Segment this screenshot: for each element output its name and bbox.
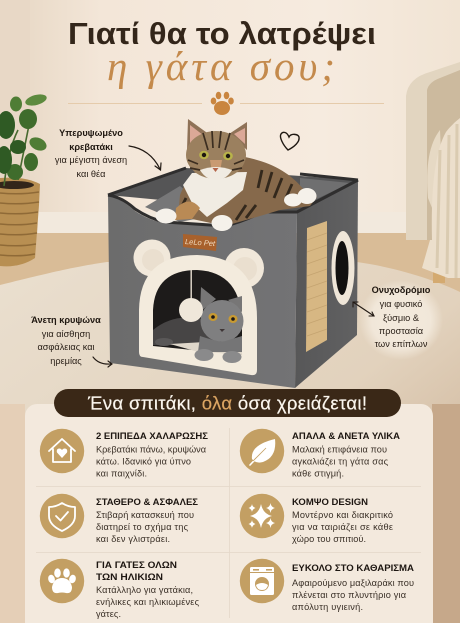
callout: scratcher: ξύσμιο & [383,313,419,323]
icon: paw [40,559,84,603]
icon: shield with check [40,494,84,538]
feature: two levels: Κρεβατάκι πάνω, κρυψώνα [96,444,207,454]
feature: easy cleaning [240,559,414,612]
callout: scratcher: των επίπλων [375,339,428,349]
subtitle: η γάτα σου; [107,43,335,89]
callout: scratcher: προστασία [379,326,424,336]
feature: all ages: γάτες. [96,609,121,619]
glow behind scratcher callout [359,280,443,360]
feature: stable and safe: διατηρεί το σχήμα της [96,522,189,532]
feature: two levels: κάτω. Ιδανικό για ύπνο [96,456,191,466]
house: front [108,195,297,388]
headline pill: Ένα σπιτάκι, όλα όσα χρειάζεται! [87,392,367,414]
feature: two levels [40,429,208,478]
feature: easy cleaning: ΕΥΚΟΛΟ ΣΤΟ ΚΑΘΑΡΙΣΜΑ [292,563,414,574]
feature: soft materials: αγκαλιάζει τη γάτα σας [292,456,389,466]
feature: soft materials: κάθε στιγμή. [292,468,344,478]
icon: house with heart [40,429,84,473]
feature: all ages: ΤΩΝ ΗΛΙΚΙΩΝ [96,572,163,583]
feature: soft materials [240,429,400,478]
feature: soft materials: ΑΠΑΛΑ & ΑΝΕΤΑ ΥΛΙΚΑ [292,431,400,442]
callout: elevated bed: κρεβατάκι [69,142,113,152]
callout: scratcher [372,285,431,349]
callout: elevated bed: και θέα [77,169,106,179]
callout: hideaway: για αίσθηση [42,329,90,339]
feature: easy cleaning: Αφαιρούμενο μαξιλαράκι που [292,578,414,588]
tabby cat on top [156,119,317,231]
feature: easy cleaning: πλένεται στο πλυντήριο για [292,590,407,600]
brand label [183,234,217,251]
house: rim [108,180,358,226]
callout: hideaway: ηρεμίας [50,356,82,366]
arrow: to elevated bed [129,146,161,170]
panel: features [25,404,433,623]
round side window [332,231,354,305]
headline pill [54,389,401,417]
feature: stable and safe: και δεν γλιστράει. [96,534,170,544]
callout: elevated bed [55,128,127,179]
feature: all ages: ενήλικες και ηλικιωμένες [96,597,200,607]
house: right side [295,180,358,388]
callout: scratcher: Ονυχοδρόμιο [372,285,431,295]
house: interior [108,168,358,213]
armchair and throw blanket [406,62,460,283]
feature: all ages [40,559,200,619]
feature: stable and safe: ΣΤΑΘΕΡΟ & ΑΣΦΑΛΕΣ [96,497,198,508]
feature: stylish design: ΚΟΜΨΟ DESIGN [292,497,368,508]
hanging pom-pom toy [179,270,203,322]
feature: stylish design: για να ταιριάζει σε κάθε [292,522,393,532]
callout: hideaway: Άνετη κρυψώνα [31,315,101,325]
divider with paw [68,92,384,115]
callout: elevated bed: για μέγιστη άνεση [55,155,127,165]
feature: stable and safe: Στιβαρή κατασκευή που [96,510,194,520]
callout: scratcher: για φυσικό [380,299,422,309]
grey cat inside [153,287,244,363]
icon: washing machine [240,559,284,603]
cat house [108,119,358,388]
feature: two levels: και παιχνίδι. [96,468,147,478]
icon: heart [280,132,299,150]
feature: two levels: 2 ΕΠΙΠΕΔΑ ΧΑΛΑΡΩΣΗΣ [96,431,208,442]
scratching panel [306,221,327,352]
callout: elevated bed: Υπερυψωμένο [59,128,123,138]
feature: all ages: Κατάλληλο για γατάκια, [96,585,193,595]
arrow: to scratcher [353,302,374,316]
title: Γιατί θα το λατρέψει [68,16,376,51]
icon: sparkles [240,494,284,538]
callout: hideaway [31,315,101,366]
feature: all ages: ΓΙΑ ΓΑΤΕΣ ΟΛΩΝ [96,560,177,571]
potted plant [0,92,49,266]
feature: easy cleaning: απόλυτη υγιεινή. [292,602,363,612]
feature: soft materials: Μαλακή επιφάνεια που [292,444,387,454]
feature: stylish design: χώρο του σπιτιού. [292,534,366,544]
icon: leaf [240,429,284,473]
callout: hideaway: ασφάλειας και [37,342,95,352]
feature: stylish design [240,494,393,544]
feature: stylish design: Μοντέρνο και διακριτικό [292,510,393,520]
bear arch entrance [134,240,264,375]
feature: stable and safe [40,494,198,544]
brand label: LeLo Pet [185,237,216,248]
arrow: to hideaway [93,357,112,367]
